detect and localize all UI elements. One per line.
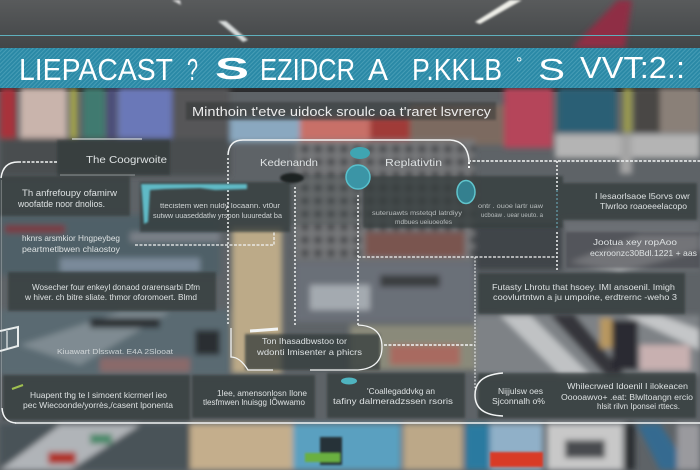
title text: LIEPACAST xyxy=(19,52,173,87)
title text: S xyxy=(215,51,249,86)
text block: streak panel: ttecistem wen nuldy locaann. vt0ur xyxy=(160,203,281,210)
text block: right 2: Jootua xey ropAoo xyxy=(593,237,677,247)
text block: bottom 2 xyxy=(203,388,307,407)
text block: right 3: coovlurtntwn a ju umpoine, erdtrernc -weho 3 xyxy=(493,292,677,302)
text block: right 2 xyxy=(590,237,697,258)
banner top rule xyxy=(0,35,700,36)
title text: S xyxy=(538,52,565,87)
text block: right 1: Tlwrloo roaoeeelacopo xyxy=(600,201,687,211)
text block: streak panel: sutww uuaseddatlw yrsoon luuuredat ba xyxy=(153,213,282,220)
text block: bottom right: Whilecrwed Idoenil I ilokeacen xyxy=(567,382,688,391)
text block: right 2: ecxroonzc30Bdl.1221 + aas xyxy=(590,248,697,258)
text block: replativtin panel: ucboaw . uear ueuto. a xyxy=(481,212,543,219)
text block: bottom right: Ooooawvo+ .eat: Blwltoangn ercio xyxy=(561,393,694,402)
icon: teal head xyxy=(346,147,370,189)
text block: bottom 2: tlesfmwen lnuisgg IÕwwamo xyxy=(203,397,305,407)
icon: green mark xyxy=(12,385,23,389)
heading: the coogrwoite: The Coogrwoite xyxy=(86,154,167,166)
text block: bracket xyxy=(492,387,545,406)
text block: center: Ton Ihasadbwstoo tor xyxy=(262,336,347,346)
text block: bottom 3: tafiny dalmeradzssen rsoris xyxy=(333,396,453,406)
title text: P.KKLB xyxy=(412,52,502,87)
heading: kedenandn: Kedenandn xyxy=(260,157,318,169)
text block: bottom right xyxy=(561,382,694,411)
text block: left 1 xyxy=(17,188,118,209)
text block: bottom 1: pec Wiecoonde/yorrès,/casent lponenta xyxy=(23,400,173,410)
title text: VVT:2.: xyxy=(580,50,685,85)
text block: left 2: hknrs arsmkior Hngpeybeg xyxy=(22,233,120,243)
icon: left white device xyxy=(0,327,18,351)
text block: right 3: Futasty Lhrotu that hsoey. IMI ansoenil. Imigh xyxy=(492,282,675,292)
text block: left 2 xyxy=(22,233,121,254)
text block: right 1 xyxy=(595,191,690,211)
translucent panels xyxy=(0,140,700,420)
icon: teal circle xyxy=(457,180,475,204)
text block: bottom 1 xyxy=(23,390,173,410)
title banner xyxy=(0,48,700,88)
title text xyxy=(19,50,685,87)
text block: left 4: Kiuawart Dlsswat. E4A 2Slooat xyxy=(57,347,174,356)
text block: bottom 1: Huapent thg te l simoent kicrmerl ieo xyxy=(30,390,167,400)
text block: left 1: woofatde noor dnolios. xyxy=(17,199,105,209)
text block: bottom right: hlsit rilvn Iponsei rttecs. xyxy=(597,402,680,411)
text block: bracket: Sjconnalh o% xyxy=(492,397,545,406)
text block: bracket: Nijjulsw oes xyxy=(498,387,543,396)
subtitle: Minthoin t'etve uidock sroulc oa t'raret lsvrercy xyxy=(192,105,492,119)
icon: teal blob xyxy=(341,378,357,384)
text block: left 3: Wosecher four enkeyl donaod orarensarbi Dfm xyxy=(32,282,200,292)
text block: left 3: w hiver. ch bitre sliate. thmor oforomoert. Blmd xyxy=(24,292,197,302)
text block: right 3 xyxy=(492,282,677,302)
text block: left 2: peartmetlbwen chlaostoy xyxy=(22,244,121,254)
text block: center: wdonti Imisenter a phicrs xyxy=(256,347,362,357)
title text: A xyxy=(368,52,388,87)
text block: bottom 2: 1lee, amensonlosn Ilone xyxy=(217,388,307,398)
heading: replativtin: Replativtin xyxy=(385,157,442,169)
text block: streak panel xyxy=(153,203,282,220)
text block: center xyxy=(256,336,362,357)
title text: ° xyxy=(516,55,522,72)
text block: replativtin panel: suteruawts mstetqd latrdiyy xyxy=(372,210,463,217)
text block: left 1: Th anfrefoupy ofamirw xyxy=(22,188,118,198)
text block: right 1: I lesaorlsaoe l5orvs owr xyxy=(595,191,690,201)
icon: dark blob xyxy=(280,173,304,183)
text block: bottom 3 xyxy=(333,386,453,406)
icon: teal streak accent xyxy=(141,184,247,224)
title text: ? xyxy=(187,52,198,87)
title text: EZIDCR xyxy=(260,52,355,87)
text block: replativtin panel: ontr . ouoe lartr uaw xyxy=(478,203,543,210)
text block: bottom 3: 'Coallegaddvkg an xyxy=(367,386,435,396)
text block: replativtin panel: mdbues ueiuoeofes xyxy=(395,219,453,226)
connector lines xyxy=(1,139,700,423)
subtitle xyxy=(186,102,496,120)
text block: replativtin panel xyxy=(372,203,543,226)
text block: left 3 xyxy=(24,282,200,302)
